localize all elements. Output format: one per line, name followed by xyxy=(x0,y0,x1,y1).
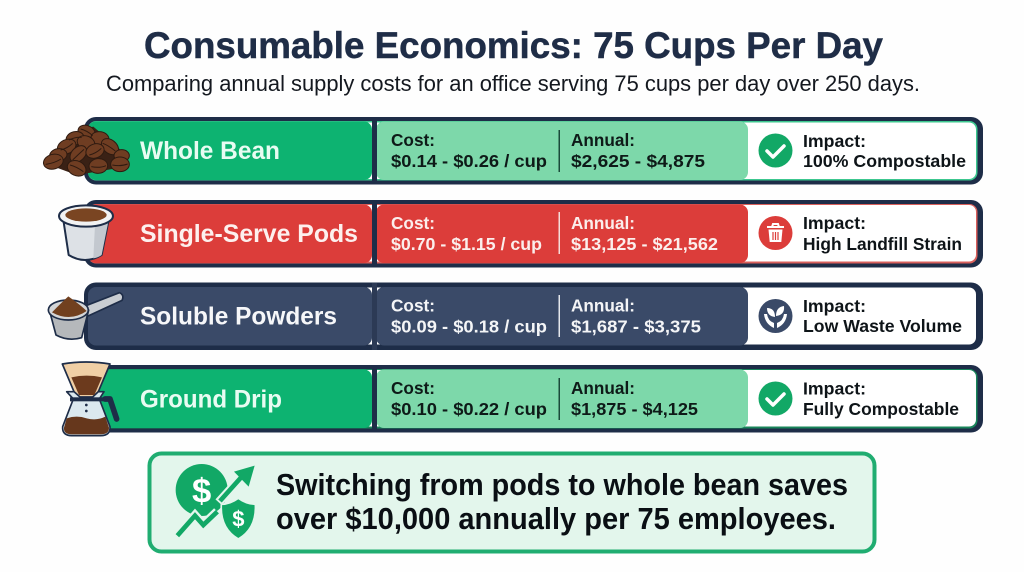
annual: Whole Bean: Annual: xyxy=(571,130,635,150)
cost: Single-Serve Pods: $0.70 - $1.15 / cup xyxy=(391,234,542,254)
row: Single-Serve Pods xyxy=(84,200,983,268)
annual: Single-Serve Pods: $13,125 - $21,562 xyxy=(571,234,718,254)
impact: Ground Drip xyxy=(803,378,959,419)
cost: Whole Bean xyxy=(391,130,547,171)
heading: Soluble Powders: Soluble Powders xyxy=(140,302,337,330)
callout text: over $10,000 annually per 75 employees. xyxy=(276,501,836,536)
annual: Ground Drip: $1,875 - $4,125 xyxy=(571,399,698,419)
row: Soluble Powders xyxy=(84,282,983,350)
impact: Soluble Powders: Low Waste Volume xyxy=(803,316,962,336)
impact: Ground Drip: Fully Compostable xyxy=(803,399,959,419)
icon: powder scoop xyxy=(48,293,123,339)
annual: Whole Bean xyxy=(571,130,705,171)
impact: Soluble Powders: Impact: xyxy=(803,296,866,316)
annual: Ground Drip: Annual: xyxy=(571,378,635,398)
annual: Ground Drip xyxy=(571,378,698,419)
callout text: Switching from pods to whole bean saves xyxy=(276,467,848,502)
impact: Soluble Powders xyxy=(803,296,962,336)
annual: Single-Serve Pods xyxy=(571,213,718,254)
icon: coffee pod xyxy=(59,205,113,260)
annual: Soluble Powders: $1,687 - $3,375 xyxy=(571,316,701,336)
cost: Soluble Powders: Cost: xyxy=(391,296,435,316)
icon: plant in hands xyxy=(758,299,792,333)
icon: money growth xyxy=(176,464,255,539)
icon: coffee beans xyxy=(42,122,129,179)
annual: Whole Bean: $2,625 - $4,875 xyxy=(571,151,705,171)
heading: Whole Bean: Whole Bean xyxy=(140,137,280,165)
cost: Ground Drip xyxy=(391,378,547,419)
cost: Single-Serve Pods xyxy=(391,213,542,254)
impact: Single-Serve Pods xyxy=(803,213,962,254)
heading: Single-Serve Pods: Single-Serve Pods xyxy=(140,220,358,248)
impact: Ground Drip: Impact: xyxy=(803,378,866,398)
row: Ground Drip xyxy=(84,365,983,432)
icon: pour-over carafe xyxy=(62,362,117,436)
cost: Soluble Powders: $0.09 - $0.18 / cup xyxy=(391,316,547,336)
impact: Single-Serve Pods: Impact: xyxy=(803,213,866,233)
annual: Soluble Powders xyxy=(571,296,701,336)
callout: savings xyxy=(150,454,874,552)
cost: Whole Bean: $0.14 - $0.26 / cup xyxy=(391,151,547,171)
cost: Ground Drip: $0.10 - $0.22 / cup xyxy=(391,399,547,419)
impact: Single-Serve Pods: High Landfill Strain xyxy=(803,234,962,254)
impact: Whole Bean xyxy=(803,131,966,171)
cost: Soluble Powders xyxy=(391,296,547,336)
icon: money growth: $ xyxy=(192,472,211,510)
icon: check xyxy=(758,134,792,168)
title: Consumable Economics: 75 Cups Per Day xyxy=(144,25,883,66)
callout text xyxy=(276,467,848,536)
cost: Whole Bean: Cost: xyxy=(391,130,435,150)
annual: Soluble Powders: Annual: xyxy=(571,296,635,316)
heading: Ground Drip: Ground Drip xyxy=(140,386,282,414)
impact: Whole Bean: Impact: xyxy=(803,131,866,151)
icon: trash can xyxy=(758,216,792,250)
subtitle: Comparing annual supply costs for an office serving 75 cups per day over 250 days. xyxy=(106,71,920,96)
impact: Whole Bean: 100% Compostable xyxy=(803,151,966,171)
icon: money growth: $ xyxy=(232,506,244,531)
row: Whole Bean xyxy=(84,117,983,184)
cost: Ground Drip: Cost: xyxy=(391,378,435,398)
cost: Single-Serve Pods: Cost: xyxy=(391,213,435,233)
annual: Single-Serve Pods: Annual: xyxy=(571,213,635,233)
icon: check xyxy=(758,382,792,416)
